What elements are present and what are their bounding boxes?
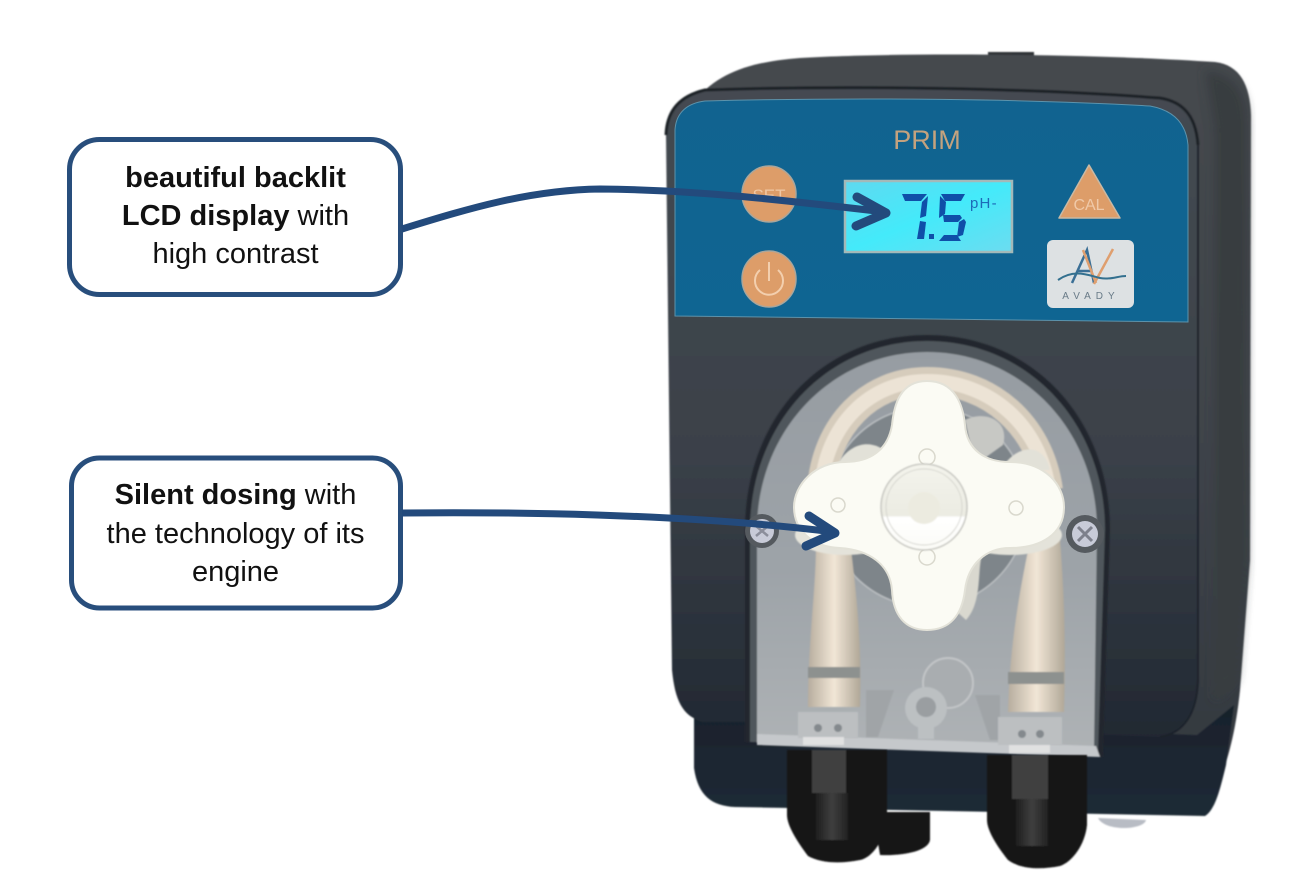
transparent cover [745,335,1110,757]
callout text: beautiful backlit [125,162,346,194]
callout box [70,140,400,294]
arrow: to LCD display [402,189,886,229]
callout: silent dosing [72,458,400,608]
left gland [787,750,887,862]
callout text: Silent dosing with [115,479,356,511]
base moulding [798,658,1062,753]
SET button [742,166,796,222]
callout: LCD display [70,140,400,294]
roller rotor [794,381,1064,630]
AVADY logo: AVADY [1062,291,1120,302]
centre gland [873,812,930,855]
callout text: engine [192,556,279,588]
blue fascia [675,99,1188,322]
arrow: to motor rotor [402,513,835,546]
pump tube [808,381,1065,712]
CAL button: CAL [1073,197,1105,214]
model name PRIM: PRIM [893,125,961,155]
CAL button [1059,165,1120,218]
callout box [72,458,400,608]
LCD display [845,181,1012,252]
SET button: SET [752,186,786,205]
AVADY logo [1047,240,1134,308]
LCD display: pH- [970,195,998,212]
cable glands [787,750,1146,868]
rear fitting [1098,818,1146,828]
right screw [1066,515,1104,553]
left screw [745,514,779,548]
control panel [675,99,1188,322]
rotor hub [881,464,967,550]
callout text: LCD display with [122,200,349,232]
callout text: the technology of its [107,518,364,550]
LCD digits [902,194,966,241]
right gland [987,755,1087,868]
callout text: high contrast [152,238,319,270]
pump illustration [666,52,1251,868]
peristaltic head [745,335,1110,757]
pump housing [666,52,1251,816]
power button [742,251,796,307]
